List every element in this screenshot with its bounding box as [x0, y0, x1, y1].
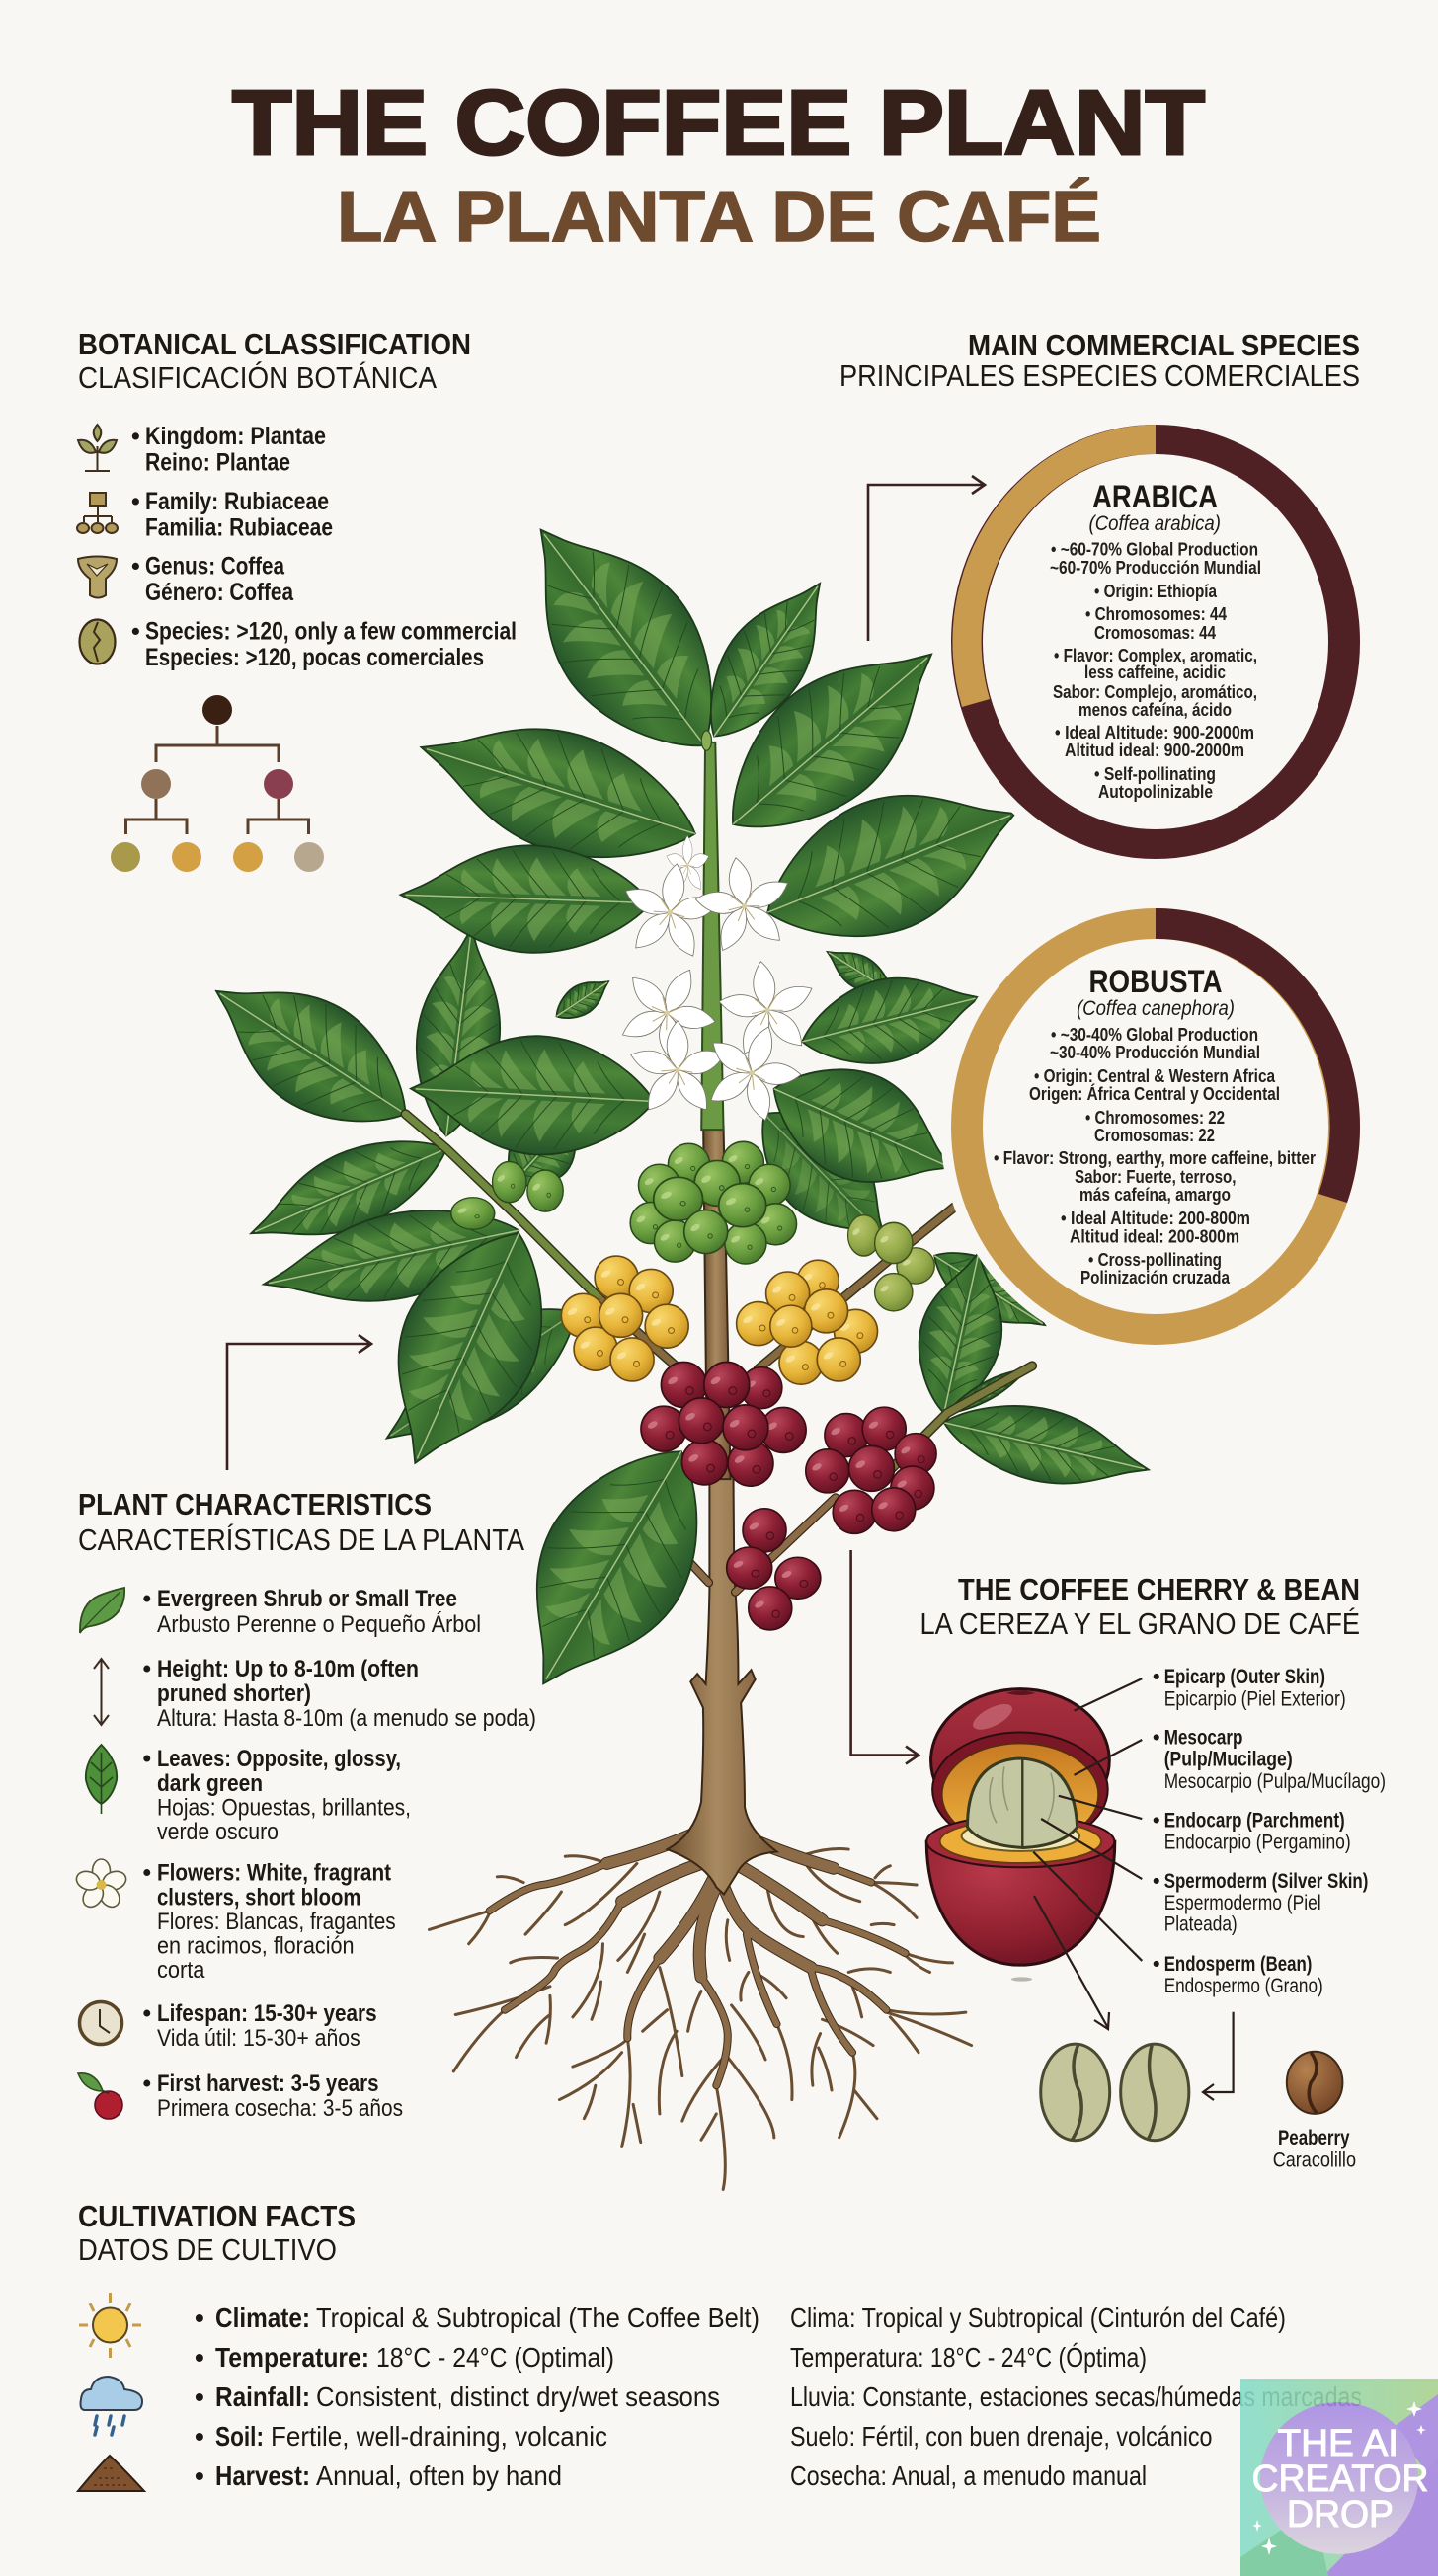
text: robusta facts: más cafeína, amargo: [1079, 1184, 1231, 1205]
arrow: stem to species: [868, 476, 985, 641]
donut ring: arabica share: [951, 425, 1360, 859]
panel: botanical classification: [77, 327, 517, 872]
text: flowers: clusters, short bloom: [157, 1884, 361, 1912]
text: cherry layers: Endocarpio (Pergamino): [1164, 1830, 1351, 1853]
facts: spanish column: Clima: Tropical y Subtropical (Cinturón del Café): [790, 2303, 1286, 2333]
text: genus: Genus: Coffea: [145, 553, 285, 581]
facts: spanish column: Temperatura: 18°C - 24°C (Óptima): [790, 2342, 1147, 2373]
text: peaberry: [1273, 2126, 1356, 2172]
text: robusta facts: Origen: África Central y Occidental: [1029, 1083, 1280, 1104]
text: first harvest: First harvest: 3-5 years: [157, 2070, 379, 2097]
facts: english column: Rainfall:: [215, 2381, 310, 2412]
heading: main commercial species: [839, 328, 1360, 393]
icon: sun: [79, 2293, 141, 2358]
icon: height arrow: [94, 1659, 109, 1725]
text: robusta facts: Sabor: Fuerte, terroso,: [1075, 1166, 1237, 1187]
berries: yellow clusters: [561, 1256, 878, 1384]
watermark badge: DROP: [1287, 2494, 1394, 2536]
text: species: Especies: >120, pocas comerciales: [145, 644, 484, 671]
icon: cherry with leaf: [78, 2073, 122, 2119]
text: family: Familia: Rubiaceae: [145, 513, 333, 541]
text: peaberry: Caracolillo: [1273, 2148, 1356, 2172]
text: robusta facts: • Chromosomes: 22: [1085, 1107, 1225, 1128]
facts: english column: Soil:: [215, 2421, 264, 2452]
text: robusta facts: ROBUSTA: [1088, 964, 1223, 999]
arrow: leaves to plant characteristics: [227, 1335, 371, 1470]
arrow: label to beans: [1203, 2012, 1234, 2100]
text: leaves: Hojas: Opuestas, brillantes,: [157, 1795, 411, 1821]
text: species: [131, 618, 517, 671]
text: arabica facts: Sabor: Complejo, aromático,: [1053, 681, 1257, 702]
icon: clock: [79, 2002, 122, 2044]
text: cherry layers: Mesocarp: [1164, 1726, 1242, 1750]
text: arabica facts: • Flavor: Complex, aromatic,: [1054, 645, 1257, 665]
facts: english column: •: [195, 2460, 204, 2491]
facts: english column: Harvest:: [215, 2460, 310, 2491]
roots and trunk: [429, 1476, 972, 2189]
text: robusta facts: [994, 964, 1316, 1288]
text: leaves: •: [142, 1746, 151, 1772]
heading: cultivation facts: [78, 2199, 356, 2267]
icon: peaberry: [1287, 2052, 1342, 2114]
text: cherry layers: •: [1153, 1952, 1160, 1976]
panel: arabica: [940, 413, 1371, 871]
text: evergreen: [142, 1586, 481, 1638]
text: evergreen: Arbusto Perenne o Pequeño Árbol: [157, 1611, 481, 1638]
text: cherry layers: Epicarp (Outer Skin): [1164, 1665, 1325, 1688]
text: first harvest: Primera cosecha: 3-5 años: [157, 2095, 403, 2122]
heading: botanical classification: BOTANICAL CLASSIFICATION: [78, 327, 471, 361]
text: height: Altura: Hasta 8-10m (a menudo se poda): [157, 1705, 536, 1732]
icon: rain cloud: [81, 2377, 142, 2435]
text: lifespan: Lifespan: 15-30+ years: [157, 2000, 377, 2027]
heading: cherry and bean: LA CEREZA Y EL GRANO DE CAFÉ: [920, 1606, 1360, 1641]
text: flowers: •: [142, 1860, 151, 1886]
text: cherry layers: •: [1153, 1665, 1160, 1688]
text: genus: •: [131, 553, 140, 581]
text: robusta facts: Polinización cruzada: [1080, 1267, 1231, 1288]
panel: plant characteristics: [74, 1487, 536, 2122]
icon: leaf: [80, 1588, 124, 1633]
text: robusta facts: (Coffea canephora): [1077, 997, 1235, 1020]
title: [232, 71, 1205, 257]
facts: english column: [195, 2303, 759, 2491]
text: leaves: Leaves: Opposite, glossy,: [157, 1746, 401, 1772]
facts: english column: •: [195, 2342, 204, 2373]
text: cherry layers: (Pulp/Mucilage): [1164, 1748, 1293, 1771]
heading: botanical classification: [78, 327, 471, 395]
facts: spanish column: [790, 2303, 1362, 2491]
text: species: •: [131, 618, 140, 646]
text: flowers: Flowers: White, fragrant: [157, 1860, 391, 1886]
leaves front: [187, 489, 1157, 1721]
leader lines: [1033, 1678, 1142, 1961]
icon: bean: [79, 620, 115, 664]
leaves behind: [362, 923, 1059, 1475]
foliage, stem, berries and flowers: [187, 489, 1157, 1721]
text: cherry layers: Endosperm (Bean): [1164, 1952, 1312, 1976]
facts: spanish column: Suelo: Fértil, con buen drenaje, volcánico: [790, 2421, 1213, 2452]
berries: small green and olive clusters: [451, 1161, 934, 1311]
text: cherry layers: Spermoderm (Silver Skin): [1164, 1869, 1368, 1893]
facts: english column: Tropical & Subtropical (The Coffee Belt): [316, 2303, 759, 2333]
donut ring: robusta share: [951, 908, 1360, 1345]
text: lifespan: [142, 2000, 377, 2052]
heading: cultivation facts: DATOS DE CULTIVO: [78, 2232, 337, 2267]
arrow: berries to cherry diagram: [851, 1550, 919, 1764]
text: leaves: dark green: [157, 1770, 263, 1797]
text: genus: [131, 553, 294, 606]
heading: cherry and bean: THE COFFEE CHERRY & BEAN: [958, 1572, 1360, 1606]
watermark badge: THE AI: [1278, 2423, 1398, 2464]
facts: english column: •: [195, 2421, 204, 2452]
text: arabica facts: ARABICA: [1092, 479, 1218, 514]
text: kingdom: [131, 423, 326, 476]
watermark badge: [1240, 2379, 1438, 2576]
berries: red clusters: [641, 1363, 936, 1630]
text: lifespan: •: [142, 2000, 151, 2027]
text: genus: Género: Coffea: [145, 579, 294, 606]
text: flowers: [142, 1860, 396, 1984]
facts: english column: Consistent, distinct dry/wet seasons: [316, 2381, 720, 2412]
text: evergreen: Evergreen Shrub or Small Tree: [157, 1586, 457, 1612]
icon: soil mound: [78, 2456, 144, 2491]
text: cherry layers: Endospermo (Grano): [1164, 1974, 1323, 1997]
facts: english column: Annual, often by hand: [316, 2460, 562, 2491]
text: arabica facts: • Self-pollinating: [1094, 763, 1216, 784]
text: robusta facts: • Flavor: Strong, earthy, more caffeine, bitter: [994, 1147, 1316, 1168]
heading: botanical classification: CLASIFICACIÓN BOTÁNICA: [78, 360, 437, 395]
heading: main commercial species: PRINCIPALES ESPECIES COMERCIALES: [839, 358, 1360, 393]
text: arabica facts: Autopolinizable: [1098, 781, 1213, 802]
title: THE COFFEE PLANT: [232, 71, 1205, 174]
text: height: pruned shorter): [157, 1680, 311, 1707]
text: leaves: verde oscuro: [157, 1819, 279, 1845]
text: arabica facts: menos cafeína, ácido: [1078, 699, 1232, 720]
text: family: Family: Rubiaceae: [145, 488, 329, 515]
text: cherry layers: Plateada): [1164, 1912, 1238, 1936]
text: family: •: [131, 488, 140, 515]
arrow: cherry to beans: [1034, 1896, 1109, 2029]
text: robusta facts: • Ideal Altitude: 200-800m: [1061, 1208, 1250, 1228]
text: cherry layers: [1153, 1665, 1386, 1997]
text: leaves: [142, 1746, 411, 1845]
heading: plant characteristics: CARACTERÍSTICAS DE LA PLANTA: [78, 1522, 524, 1557]
icon: genus: [78, 557, 117, 598]
text: kingdom: Kingdom: Plantae: [145, 423, 326, 450]
facts: english column: Temperature:: [215, 2342, 369, 2373]
text: robusta facts: ~30-40% Producción Mundial: [1050, 1042, 1260, 1062]
text: arabica facts: ~60-70% Producción Mundial: [1050, 557, 1261, 578]
text: flowers: corta: [157, 1957, 205, 1984]
icon: flower: [74, 1859, 128, 1911]
text: arabica facts: • Origin: Ethiopía: [1094, 581, 1218, 601]
text: arabica facts: (Coffea arabica): [1088, 512, 1221, 535]
text: height: Height: Up to 8-10m (often: [157, 1656, 419, 1682]
text: robusta facts: • ~30-40% Global Production: [1051, 1024, 1258, 1045]
text: arabica facts: Cromosomas: 44: [1094, 622, 1217, 643]
text: flowers: Flores: Blancas, fragantes: [157, 1909, 396, 1935]
panel: robusta: [940, 898, 1371, 1356]
icon: plant: [78, 425, 117, 471]
text: lifespan: Vida útil: 15-30+ años: [157, 2025, 360, 2052]
text: arabica facts: less caffeine, acidic: [1084, 662, 1226, 682]
facts: english column: •: [195, 2381, 204, 2412]
watermark badge: CREATOR: [1252, 2459, 1428, 2500]
facts: english column: 18°C - 24°C (Optimal): [376, 2342, 614, 2373]
text: robusta facts: Cromosomas: 22: [1094, 1125, 1215, 1145]
illustration: coffee plant: [187, 489, 1157, 2189]
text: robusta facts: • Origin: Central & Western Africa: [1034, 1065, 1276, 1086]
branches: [405, 1114, 1032, 1476]
flowers: [601, 835, 824, 1133]
text: peaberry: Peaberry: [1278, 2126, 1350, 2149]
text: cherry layers: Epicarpio (Piel Exterior): [1164, 1686, 1346, 1710]
panel: cultivation facts: [78, 2199, 1362, 2491]
stem: [701, 731, 731, 1479]
text: cherry layers: •: [1153, 1808, 1160, 1832]
text: cherry layers: Mesocarpio (Pulpa/Mucílago): [1164, 1769, 1386, 1793]
text: arabica facts: • Chromosomes: 44: [1085, 603, 1228, 624]
text: evergreen: •: [142, 1586, 151, 1612]
taxonomy tree diagram: [111, 695, 324, 872]
berries: green cluster: [630, 1141, 797, 1264]
facts: english column: Fertile, well-draining, volcanic: [271, 2421, 607, 2452]
text: robusta facts: Altitud ideal: 200-800m: [1070, 1226, 1239, 1247]
text: kingdom: •: [131, 423, 140, 450]
text: cherry layers: •: [1153, 1869, 1160, 1893]
text: flowers: en racimos, floración: [157, 1933, 355, 1960]
text: height: [142, 1656, 536, 1732]
text: first harvest: •: [142, 2070, 151, 2097]
illustration: cherry cross-section: [926, 1689, 1115, 1982]
text: family: [131, 488, 333, 541]
heading: main commercial species: MAIN COMMERCIAL SPECIES: [968, 328, 1360, 362]
icon: green beans: [1041, 2044, 1189, 2141]
facts: english column: •: [195, 2303, 204, 2333]
text: cherry layers: •: [1153, 1726, 1160, 1750]
facts: spanish column: Cosecha: Anual, a menudo manual: [790, 2460, 1147, 2491]
text: first harvest: [142, 2070, 403, 2122]
text: height: •: [142, 1656, 151, 1682]
text: arabica facts: [1050, 479, 1261, 802]
title: LA PLANTA DE CAFÉ: [337, 178, 1101, 257]
text: kingdom: Reino: Plantae: [145, 448, 290, 476]
text: robusta facts: • Cross-pollinating: [1088, 1249, 1222, 1270]
text: arabica facts: • Ideal Altitude: 900-2000m: [1055, 722, 1254, 742]
icon: family tree: [77, 493, 118, 533]
heading: cherry and bean: [920, 1572, 1360, 1641]
text: species: Species: >120, only a few commercial: [145, 618, 517, 646]
heading: cultivation facts: CULTIVATION FACTS: [78, 2199, 356, 2233]
icon: leaf upright: [86, 1745, 117, 1814]
facts: english column: Climate:: [215, 2303, 310, 2333]
panel: coffee cherry and bean: [920, 1572, 1386, 2172]
text: cherry layers: Espermodermo (Piel: [1164, 1891, 1321, 1914]
heading: plant characteristics: [78, 1487, 524, 1557]
text: arabica facts: Altitud ideal: 900-2000m: [1065, 740, 1244, 760]
heading: plant characteristics: PLANT CHARACTERISTICS: [78, 1487, 432, 1522]
text: cherry layers: Endocarp (Parchment): [1164, 1808, 1345, 1832]
text: arabica facts: • ~60-70% Global Production: [1051, 539, 1258, 559]
